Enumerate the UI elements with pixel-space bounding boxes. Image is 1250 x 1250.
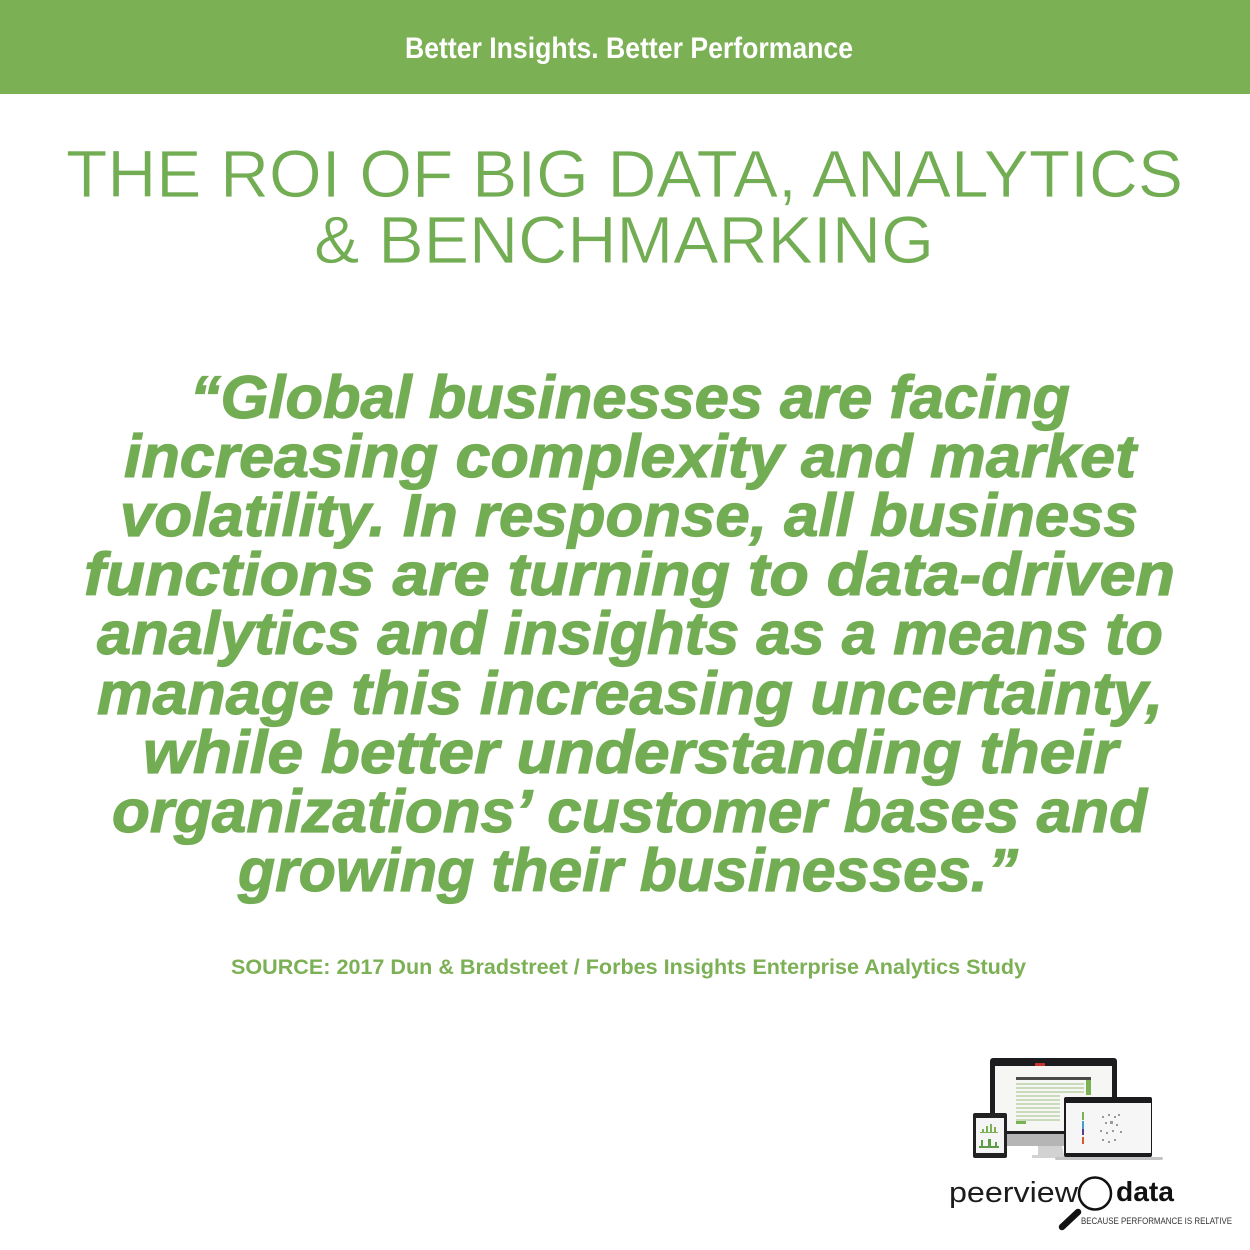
logo wordmark bold: data: [1116, 1176, 1174, 1207]
title: [66, 137, 1183, 278]
source line: SOURCE: 2017 Dun & Bradstreet / Forbes Insights Enterprise Analytics Study: [231, 956, 1026, 979]
icon: magnifying glass: [1062, 1178, 1111, 1227]
header tagline: Better Insights. Better Performance: [405, 32, 853, 65]
title: & BENCHMARKING: [314, 203, 934, 278]
quote text block: analytics and insights as a means to: [97, 600, 1163, 667]
logo: peerview data: [949, 1176, 1232, 1227]
logo wordmark light: peerview: [949, 1177, 1079, 1209]
icon: tablet: [973, 1113, 1007, 1158]
quote text block: organizations’ customer bases and: [112, 778, 1148, 845]
title: THE ROI OF BIG DATA, ANALYTICS: [66, 137, 1183, 212]
quote text block: while better understanding their: [143, 719, 1122, 786]
quote text block: manage this increasing uncertainty,: [97, 660, 1163, 727]
header band: [0, 0, 1250, 94]
quote text block: increasing complexity and market: [124, 423, 1139, 490]
quote text block: “Global businesses are facing: [190, 364, 1070, 431]
icon: laptop: [1055, 1097, 1163, 1160]
icon: desktop monitor: [990, 1058, 1117, 1158]
quote text block: functions are turning to data-driven: [84, 541, 1175, 608]
quote text block: [84, 364, 1175, 904]
quote text block: volatility. In response, all business: [120, 482, 1138, 549]
icon: devices mockup: [973, 1058, 1163, 1160]
quote text block: growing their businesses.”: [237, 837, 1018, 904]
